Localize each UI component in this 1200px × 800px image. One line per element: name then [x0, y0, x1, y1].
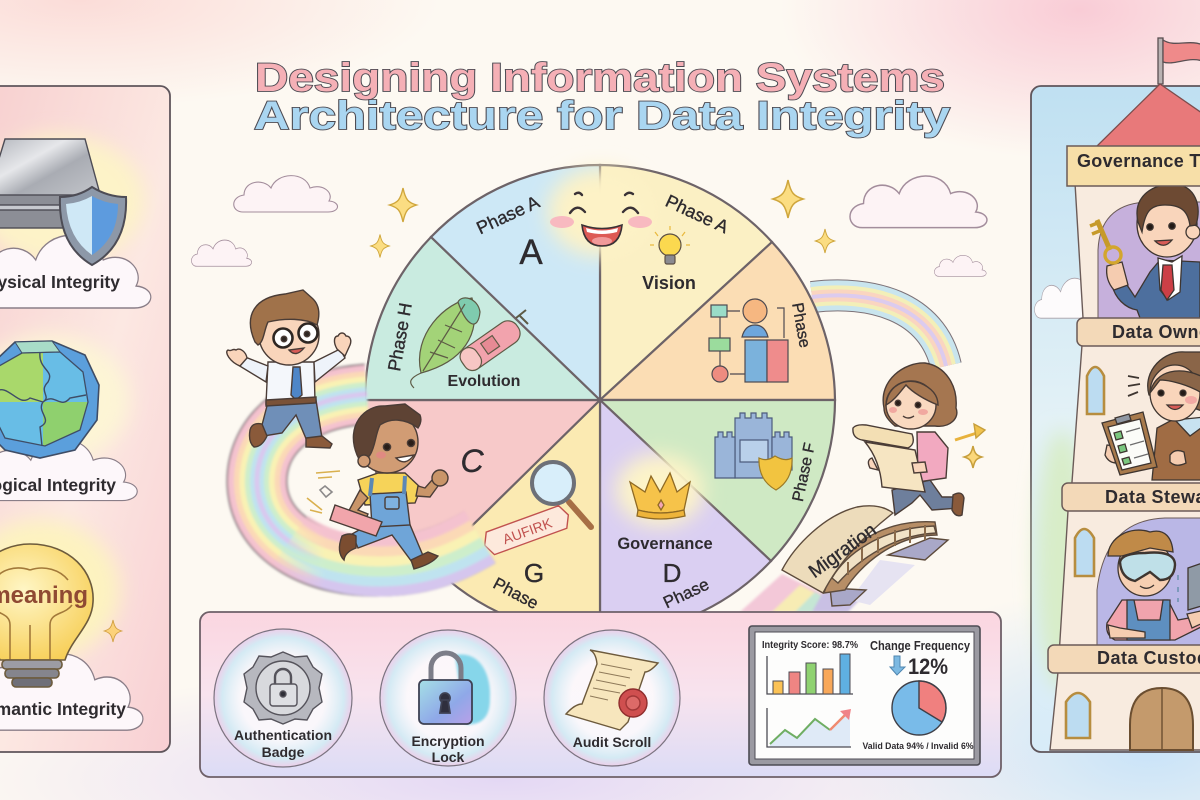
encryption lock label: Encryption — [411, 733, 485, 749]
phase lower left label: Phase — [490, 574, 542, 613]
icon: gem globe — [0, 341, 99, 458]
cloud — [0, 235, 151, 308]
icon: evolution leaf and usb — [411, 298, 528, 388]
sparkle — [104, 620, 122, 642]
bar chart — [767, 654, 853, 694]
letter G: G — [524, 558, 544, 588]
icon: server — [0, 139, 103, 228]
panel: governance tower — [1031, 38, 1200, 752]
pie chart — [892, 681, 946, 735]
migration banner — [782, 506, 893, 593]
phase H label: Phase H — [384, 301, 416, 373]
stone feet — [888, 538, 948, 560]
data steward band — [1062, 483, 1200, 511]
icon: crown — [616, 454, 704, 526]
phase A upper right label: Phase A — [662, 191, 732, 237]
stamp audit — [481, 504, 572, 557]
right rainbow arc — [812, 295, 946, 366]
audit scroll label: Audit Scroll — [573, 734, 651, 750]
bridge arch — [824, 522, 937, 593]
encryption lock label: Lock — [432, 749, 465, 765]
hill — [1036, 430, 1088, 690]
icon: badge — [244, 652, 322, 724]
phase A upper left label: Phase A — [473, 192, 543, 238]
cloud — [0, 654, 143, 730]
letter C: C — [460, 443, 484, 479]
line chart — [767, 708, 851, 747]
icon: castle and shield — [715, 413, 792, 490]
flag — [1158, 38, 1200, 84]
evolution label: Evolution — [448, 373, 520, 390]
character: data steward — [1102, 352, 1200, 480]
icon: vision light bulb — [650, 226, 690, 264]
phase wheel — [365, 165, 835, 635]
encryption lock bubble — [380, 630, 516, 766]
valid data label: Valid Data 94% / Invalid 6% — [862, 741, 974, 752]
twelve percent: 12% — [908, 654, 948, 679]
rainbow under bridge — [740, 574, 867, 612]
data owner band — [1077, 318, 1200, 346]
background clouds and sparkles — [191, 176, 987, 276]
panel: security tools and dashboard — [200, 612, 1001, 777]
panel: integrity types — [0, 86, 170, 752]
flow diagram and puzzle — [709, 299, 788, 382]
change frequency label: Change Frequency — [870, 638, 971, 653]
character: girl with scroll — [853, 363, 985, 516]
cloud — [1035, 278, 1107, 318]
down arrow — [890, 656, 905, 675]
character: data owner — [1090, 184, 1200, 318]
bridge with migration banner: Migration — [805, 520, 881, 583]
character: data custodian — [1107, 530, 1200, 640]
letter A: A — [519, 233, 543, 272]
motion marks near running boy — [307, 471, 340, 513]
phase right upper label: Phase — [788, 301, 813, 349]
logical integrity item — [0, 341, 137, 501]
smiling face — [548, 168, 652, 256]
governance label: Governance — [617, 535, 713, 553]
title: Architecture for Data Integrity — [254, 94, 951, 138]
bridge with migration banner — [782, 506, 948, 606]
data custodian band — [1048, 645, 1200, 673]
arched windows and door — [1066, 202, 1200, 750]
authentication badge label: Authentication — [234, 727, 332, 743]
roof — [1095, 84, 1200, 148]
icon: shield — [60, 187, 126, 265]
authentication badge bubble — [214, 629, 352, 767]
left rainbow ribbon — [257, 394, 493, 591]
phase lower right label: Phase — [660, 575, 712, 612]
phase right lower label: Phase F — [790, 441, 819, 503]
icon: padlock — [419, 653, 472, 724]
bridge shadow — [850, 560, 915, 605]
letter D: D — [663, 558, 681, 588]
character: glasses man — [227, 290, 351, 448]
authentication badge label: Badge — [262, 744, 305, 760]
physical integrity item — [0, 139, 151, 308]
semantic integrity item — [0, 544, 143, 730]
vision label: Vision — [642, 273, 696, 293]
stamp audit: AUFIRK — [500, 514, 555, 547]
integrity score label: Integrity Score: 98.7% — [762, 640, 858, 651]
character: running boy — [330, 404, 448, 569]
icon: scroll — [566, 650, 658, 730]
title — [254, 56, 951, 138]
icon: magnifier — [532, 462, 591, 527]
wheel sectors — [365, 165, 835, 635]
governance tier band — [1067, 146, 1200, 186]
icon: light bulb — [0, 544, 93, 687]
tower body — [1050, 183, 1200, 750]
cloud — [0, 439, 137, 501]
audit scroll bubble — [544, 630, 680, 766]
title: Designing Information Systems — [255, 56, 945, 100]
dashboard — [749, 626, 980, 765]
